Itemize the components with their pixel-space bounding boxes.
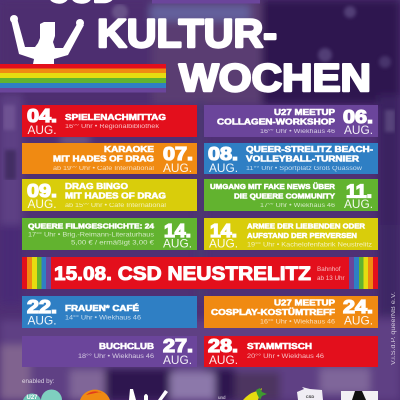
event 14 Aug film: 14. [164, 221, 191, 241]
banner: 15.08 CSD Neustrelitz [22, 257, 378, 289]
event 27 Aug: BUCHCLUB [99, 342, 154, 351]
imprint vertical text: V.i.S.d.P. queerNB e.V. [391, 292, 397, 365]
banner: 15.08 CSD Neustrelitz: 15.08. CSD NEUSTRELITZ [54, 263, 311, 285]
top purple bar [152, 0, 260, 4]
event 24 Aug [204, 296, 378, 328]
event 28 Aug: AUG. [209, 353, 238, 367]
event 22 Aug: 22. [27, 297, 57, 317]
event 14 Aug film: 17°° Uhr • Brig.-Reimann-Literaturhaus [28, 232, 154, 238]
event 07 Aug: MIT HADES OF DRAG [53, 154, 154, 164]
event 22 Aug: FRAUEN* CAFÉ [65, 304, 139, 313]
event 11 Aug: DIE QUEERE COMMUNITY [234, 192, 335, 200]
event 28 Aug: 28. [208, 336, 238, 356]
logo: black and white square [341, 391, 378, 400]
event 24 Aug: U27 MEETUP [274, 298, 335, 308]
event 14 Aug Armee: 19°° Uhr • Kachelofenfabrik Neustrelitz [247, 242, 372, 248]
event 06 Aug [204, 105, 378, 137]
event 11 Aug: UMGANG MIT FAKE NEWS ÜBER [210, 182, 336, 191]
event 22 Aug: 14°° Uhr • Wiekhaus 46 [65, 316, 142, 322]
event 14 Aug Armee [204, 218, 378, 250]
event 14 Aug film: 5,00 € / ermäßigt 3,00 € [71, 240, 155, 246]
event 04 Aug: SPIELENACHMITTAG [65, 113, 166, 122]
event 24 Aug: COSPLAY-KOSTÜMTREFF [211, 308, 335, 317]
event 08 Aug: VOLLEYBALL-TURNIER [246, 154, 359, 164]
logo: orange-red circle [80, 390, 110, 400]
event 08 Aug: QUEER-STRELITZ BEACH- [246, 145, 374, 154]
event 14 Aug film: AUG. [163, 236, 192, 250]
event 22 Aug: AUG. [28, 314, 56, 328]
event 09 Aug: DRAG BINGO [65, 182, 128, 191]
event 14 Aug Armee: ARMEE DER LIEBENDEN ODER [247, 222, 366, 230]
event 07 Aug: AUG. [163, 161, 192, 175]
event 24 Aug: 16°° Uhr • Wiekhaus 46 [260, 320, 336, 326]
event 09 Aug [22, 179, 197, 211]
logo: white figure [129, 389, 168, 400]
event 28 Aug [204, 336, 378, 367]
event 04 Aug [22, 105, 197, 137]
event 09 Aug: 09. [27, 181, 57, 201]
event 11 Aug: 11. [346, 182, 372, 202]
event 08 Aug: 11°° Uhr • Sportplatz Groß Quassow [246, 166, 363, 172]
event 28 Aug: STAMMTISCH [247, 342, 312, 351]
logo: U27 [23, 390, 62, 400]
rainbow left [27, 257, 51, 289]
event 24 Aug: 24. [343, 297, 373, 317]
logo: yellow and green [243, 388, 267, 400]
event 14 Aug Armee: 14. [210, 221, 237, 241]
rainbow band [0, 64, 166, 92]
event 11 Aug: AUG. [344, 197, 373, 211]
banner: 15.08 CSD Neustrelitz: Bahnhof [317, 266, 341, 273]
event 08 Aug: AUG. [209, 161, 238, 175]
title: CSD Kultur-Wochen [46, 0, 371, 100]
banner: 15.08 CSD Neustrelitz: ab 13 Uhr [317, 275, 345, 282]
event 06 Aug: 16°° Uhr • Wiekhaus 46 [260, 129, 336, 135]
event 27 Aug: AUG. [163, 353, 192, 367]
event 07 Aug: KARAOKE [104, 145, 154, 154]
event 06 Aug: 06. [343, 107, 373, 127]
event 04 Aug: 04. [27, 106, 57, 126]
event 04 Aug: 16°° Uhr • Regionalbibliothek [65, 124, 160, 130]
event 07 Aug: ab 19°° Uhr • Cafe International [53, 166, 154, 172]
event 27 Aug [22, 336, 197, 367]
title: CSD Kultur-Wochen: WOCHEN [179, 57, 371, 100]
event 14 Aug film [22, 218, 197, 250]
event 28 Aug: 20°° Uhr • Wiekhaus 46 [247, 353, 325, 360]
event 07 Aug: 07. [163, 144, 193, 164]
event 08 Aug [204, 143, 378, 175]
event 09 Aug: MIT HADES OF DRAG [65, 192, 166, 200]
event 11 Aug [204, 179, 378, 211]
und label: und [218, 395, 226, 400]
event 27 Aug: 27. [163, 336, 193, 356]
event 06 Aug: AUG. [344, 123, 373, 137]
rainbow right [349, 257, 373, 289]
enabled by label: enabled by: [22, 378, 55, 385]
event 14 Aug film: QUEERE FILMGESCHICHTE: 24 [28, 222, 155, 230]
event 14 Aug Armee: AUFSTAND DER PERVERSEN [247, 231, 357, 240]
event 22 Aug [22, 296, 197, 328]
event 14 Aug Armee: AUG. [209, 236, 238, 250]
event 04 Aug: AUG. [28, 123, 56, 137]
event 06 Aug: COLLAGEN-WORKSHOP [217, 118, 335, 126]
logo: speech bubble: CSD [306, 394, 314, 399]
event 27 Aug: 18°° Uhr • Wiekhaus 46 [78, 353, 155, 360]
event 07 Aug [22, 143, 197, 175]
icon: cheering figure [10, 15, 84, 64]
event 09 Aug: AUG. [28, 197, 56, 211]
title: CSD Kultur-Wochen: KULTUR- [97, 12, 277, 56]
event 08 Aug: 08. [208, 144, 238, 164]
event 06 Aug: U27 MEETUP [274, 108, 335, 117]
event 11 Aug: 17°° Uhr • Wiekhaus 46 [260, 203, 336, 209]
event 09 Aug: ab 15°° Uhr • Cafe International [65, 203, 166, 209]
event 24 Aug: AUG. [344, 314, 373, 328]
logo: speech bubble [297, 387, 323, 400]
